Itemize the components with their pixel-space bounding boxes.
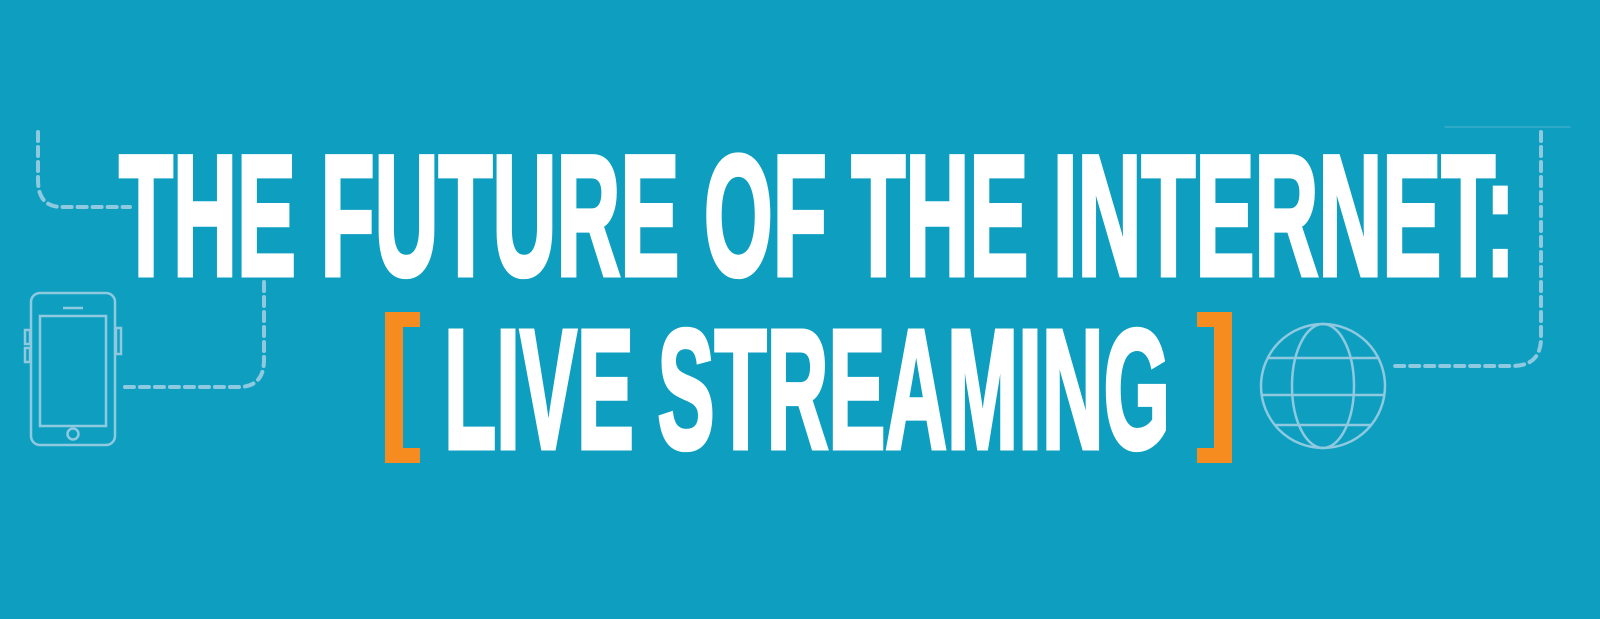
left orange bracket [385,312,420,463]
dashed connector: top left [38,132,130,207]
dashed connector: phone to title [124,282,264,387]
right orange bracket [1197,312,1232,463]
dashed connector: globe to title [1392,127,1570,366]
icon: globe [1261,324,1385,448]
icon: smartphone [25,293,121,445]
